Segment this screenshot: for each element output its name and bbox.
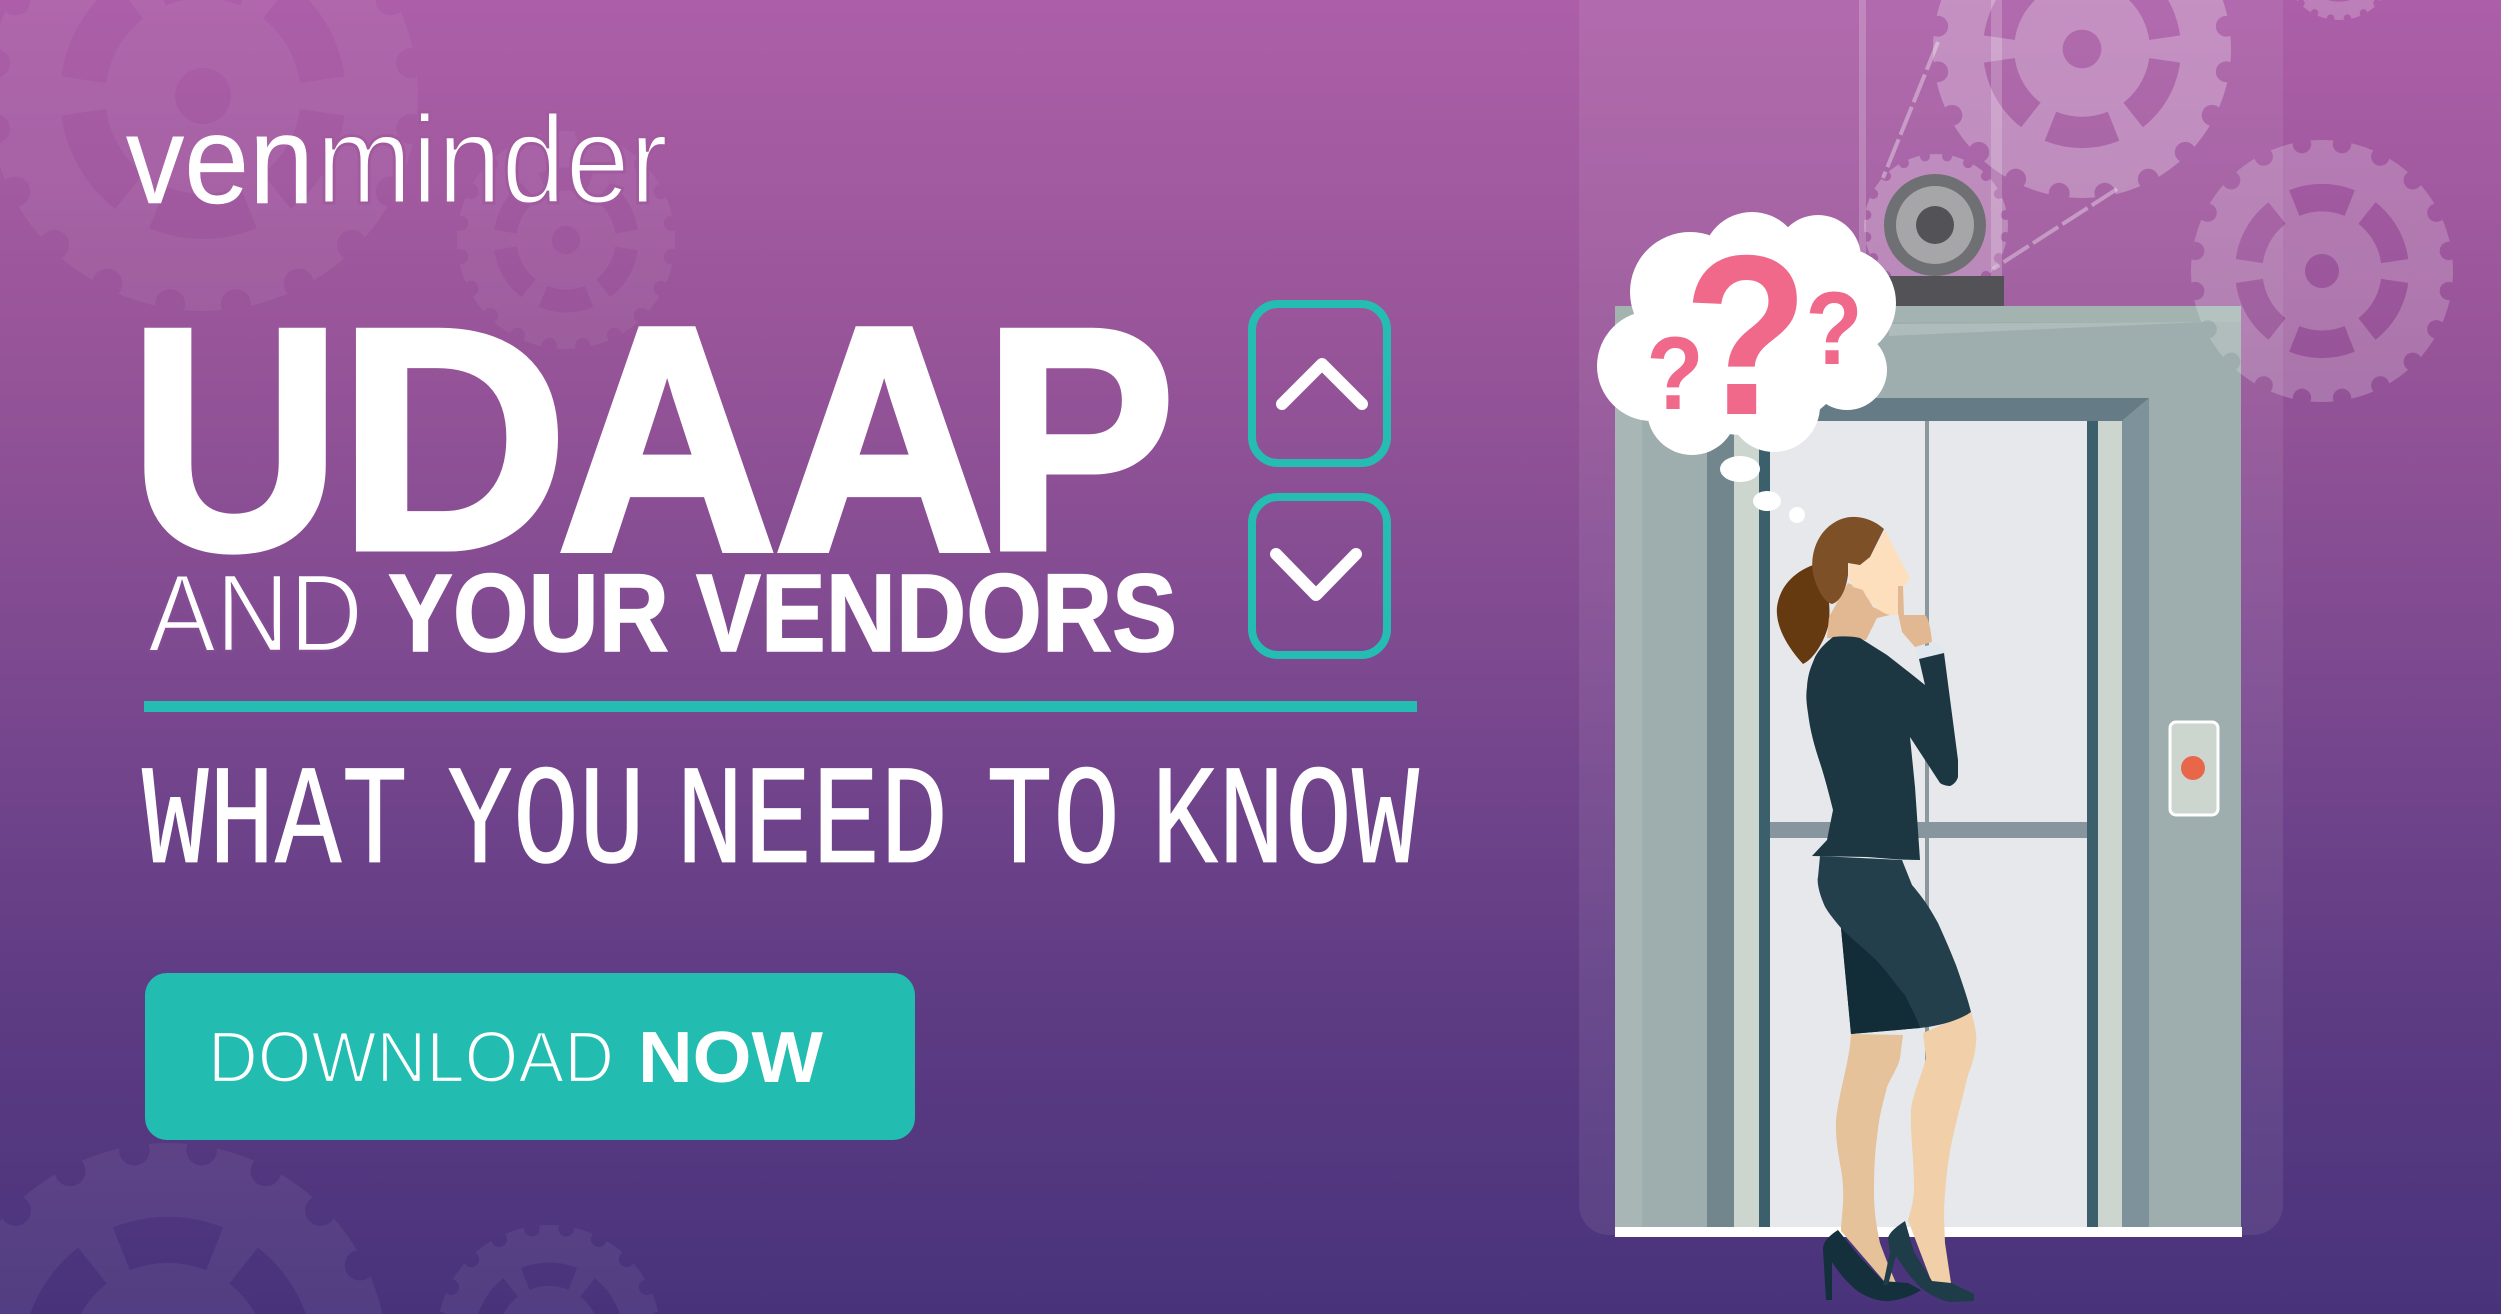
back shoe: [1823, 1230, 1921, 1301]
cuff: [1915, 643, 1944, 659]
tagline: NEED: [676, 744, 948, 905]
gear: large top left: [0, 0, 418, 311]
teal divider: [144, 701, 1417, 712]
icon: down arrow button: [1252, 497, 1387, 655]
subtitle: and your vendors: [148, 552, 1177, 675]
face: [1848, 530, 1910, 615]
gear: large top right: [1933, 0, 2231, 198]
icon: elevator motor: [1884, 174, 2004, 307]
question marks: [1646, 208, 1863, 462]
gear: large bottom left: [0, 1143, 388, 1314]
elevator call button: [2170, 722, 2218, 815]
gear: top edge right: [2296, 0, 2382, 20]
question marks: ?: [1805, 269, 1863, 386]
thought bubble: [1597, 212, 1896, 523]
hand and finger: [1898, 586, 1932, 647]
back leg: [1836, 1034, 1903, 1283]
woman thinking: [1777, 517, 1976, 1302]
hair: [1812, 517, 1884, 604]
gear: right, overlapping elevator: [2191, 140, 2453, 402]
gear: small top left: [457, 131, 675, 349]
elevator: [1615, 306, 2242, 1237]
tagline: [142, 744, 1420, 905]
tagline: TO: [986, 744, 1120, 905]
tagline: WHAT: [142, 744, 408, 905]
tagline: KNOW: [1151, 744, 1420, 905]
title: UDAAP: A: [558, 261, 776, 617]
jacket: [1806, 636, 1958, 860]
title: UDAAP: P: [983, 262, 1176, 617]
gear: small bottom left: [437, 1225, 661, 1314]
logo: venminder: minder: [316, 91, 668, 230]
front leg: [1908, 1012, 1976, 1283]
subtitle: and your vendors: AND: [148, 552, 363, 675]
skirt: [1818, 856, 1971, 1034]
title: UDAAP: U: [129, 261, 341, 616]
button: download now: NOW: [638, 1018, 823, 1098]
title: UDAAP: [129, 261, 1176, 617]
title: UDAAP: D: [337, 261, 569, 617]
question marks: ?: [1683, 208, 1809, 462]
logo: venminder: ven: [126, 91, 314, 230]
gear: small behind motor: [1864, 154, 2008, 276]
elevator ropes: [1859, 0, 2117, 277]
front shoe: [1883, 1221, 1974, 1302]
title: UDAAP: A: [775, 261, 993, 617]
question marks: ?: [1646, 314, 1704, 431]
logo: venminder: [126, 91, 668, 230]
button: download now: [145, 973, 915, 1140]
ponytail: [1777, 565, 1829, 664]
icon: up arrow button: [1252, 304, 1387, 463]
button: download now: DOWNLOAD: [208, 1018, 614, 1098]
skirt shadow: [1841, 928, 1920, 1034]
tagline: YOU: [447, 744, 645, 905]
subtitle: and your vendors: YOUR VENDORS: [388, 552, 1177, 675]
neck: [1827, 583, 1890, 640]
panel: elevator shaft: [1579, 0, 2283, 1235]
